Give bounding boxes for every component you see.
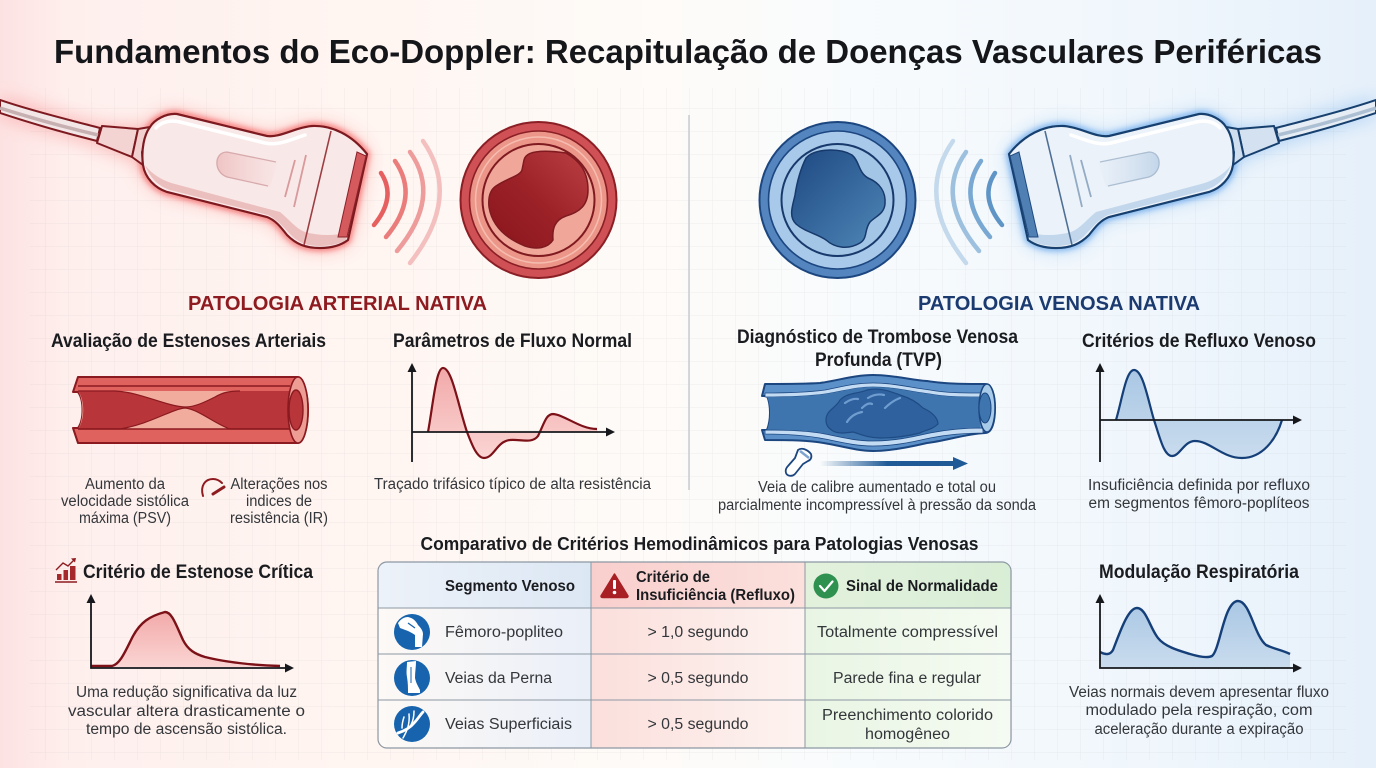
chart: triphasic waveform: [408, 363, 615, 462]
illustration: vein with thrombus: [762, 375, 995, 451]
text: veias normais: [1069, 684, 1329, 738]
icon: arterial cross-section: [460, 122, 616, 278]
table: comparison of hemodynamic criteria: [378, 562, 1011, 748]
row 2: normalidade: Parede fina e regular: [833, 670, 981, 687]
row 1: critério: > 1,0 segundo: [648, 624, 748, 641]
text: uma redução: Uma redução significativa da luz: [76, 684, 297, 701]
row 2: veias da perna: Veias da Perna: [445, 670, 552, 687]
text: índices de resistência: [230, 476, 328, 527]
text: veias normais: Veias normais devem apresentar fluxo: [1069, 684, 1329, 701]
icon: venous sound waves: [936, 141, 1002, 263]
icon: arterial ultrasound probe: [0, 100, 367, 248]
text: PSV: [61, 476, 189, 527]
icon: gauge: [202, 479, 224, 496]
text: veia de calibre: Veia de calibre aumentado e total ou: [758, 479, 996, 496]
heading: modulação respiratória: Modulação Respiratória: [1099, 562, 1299, 583]
text: insuficiência: em segmentos fêmoro-poplíteos: [1088, 495, 1310, 512]
heading: parâmetros de fluxo: Parâmetros de Fluxo Normal: [393, 331, 632, 352]
heading: diagnóstico TVP: Profunda (TVP): [815, 350, 942, 371]
text: veia de calibre: [718, 479, 1036, 514]
text: insuficiência: [1088, 477, 1310, 512]
table header: critério de insuficiência: Critério de: [636, 569, 710, 586]
text: veias normais: modulado pela respiração, com: [1086, 702, 1312, 719]
title: Fundamentos do Eco-Doppler: Recapitulação de Doenças Vasculares Periféricas: [54, 34, 1322, 71]
text: uma redução: tempo de ascensão sistólica.: [86, 721, 287, 738]
row 1: fêmoro-popliteo: Fêmoro-popliteo: [445, 624, 563, 641]
icon: venous ultrasound probe: [1009, 100, 1376, 248]
icon: warning triangle: [601, 574, 628, 598]
text: veia de calibre: parcialmente incompressível à pressão da sonda: [718, 497, 1036, 514]
heading: diagnóstico TVP: [737, 327, 1018, 371]
table header: segmento venoso: Segmento Venoso: [445, 578, 575, 595]
icon: green check: [814, 574, 838, 598]
chart: critical stenosis waveform: [86, 594, 294, 672]
row 3: critério: > 0,5 segundo: [648, 716, 748, 733]
heading: avaliação de estenoses: Avaliação de Estenoses Arteriais: [51, 331, 326, 352]
heading: critério de estenose: Critério de Estenose Crítica: [83, 562, 313, 583]
icon: superficial veins: [394, 706, 430, 742]
row 3: normalidade: homogêneo: [865, 726, 950, 743]
heading: comparativo: Comparativo de Critérios Hemodinâmicos para Patologias Venosas: [420, 533, 978, 554]
chart: respiratory modulation waveform: [1096, 594, 1302, 672]
text: índices de resistência: Alterações nos: [230, 476, 328, 493]
center divider: [688, 115, 690, 490]
text: uma redução: [68, 684, 305, 738]
icon: leg: [394, 660, 430, 696]
heading: patologia arterial: PATOLOGIA ARTERIAL NATIVA: [188, 292, 487, 315]
text: PSV: Aumento da: [85, 476, 165, 493]
text: PSV: máxima (PSV): [79, 510, 171, 527]
table header: critério de insuficiência: [636, 569, 795, 604]
row 3: veias superficiais: Veias Superficiais: [445, 716, 572, 733]
text: veias normais: aceleração durante a expiração: [1094, 721, 1304, 738]
text: índices de resistência: indices de: [246, 493, 312, 510]
row 1: normalidade: Totalmente compressível: [817, 624, 998, 641]
chart: venous reflux waveform: [1096, 363, 1302, 462]
icon: venous cross-section: [760, 122, 916, 278]
table header: critério de insuficiência: Insuficiência (Refluxo): [636, 587, 795, 604]
icon: knee: [394, 614, 430, 650]
icon: rising bars chart: [55, 558, 77, 582]
text: uma redução: vascular altera drasticamente o: [68, 703, 305, 720]
icon: small probe with arrow: [786, 449, 968, 476]
row 3: normalidade: [822, 707, 993, 743]
text: PSV: velocidade sistólica: [61, 493, 189, 510]
row 3: normalidade: Preenchimento colorido: [822, 707, 993, 724]
row 2: critério: > 0,5 segundo: [648, 670, 748, 687]
heading: patologia venosa: PATOLOGIA VENOSA NATIVA: [918, 292, 1200, 315]
text: índices de resistência: resistência (IR): [230, 510, 328, 527]
icon: arterial sound waves: [374, 141, 440, 263]
table header: sinal de normalidade: Sinal de Normalidade: [846, 578, 998, 595]
text: traçado trifásico: Traçado trifásico típico de alta resistência: [374, 476, 651, 493]
heading: critérios de refluxo: Critérios de Refluxo Venoso: [1082, 331, 1316, 352]
heading: diagnóstico TVP: Diagnóstico de Trombose Venosa: [737, 327, 1018, 348]
illustration: stenotic artery: [73, 377, 308, 443]
text: insuficiência: Insuficiência definida por refluxo: [1088, 477, 1310, 494]
